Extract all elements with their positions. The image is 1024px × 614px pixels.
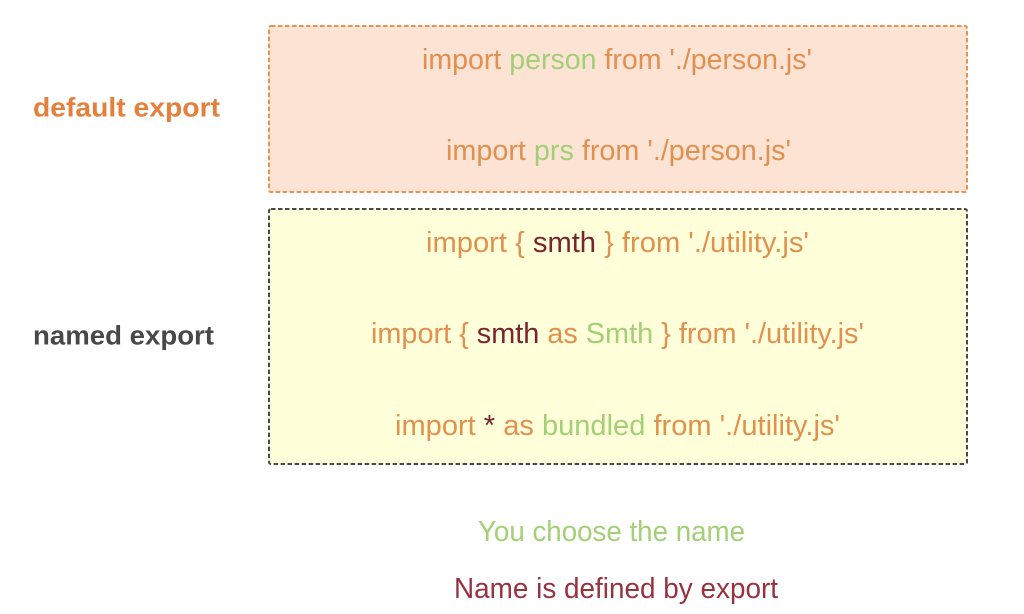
- label: named export: named export: [33, 320, 214, 350]
- code line: import smth as Smth: import { smth as Smth } from './utility.js': [371, 318, 864, 350]
- legend: name is defined by export: Name is defined by export: [454, 573, 778, 605]
- code line: import person: import person from './person.js': [422, 44, 812, 76]
- panel: default export imports: [269, 26, 967, 192]
- code line: import smth: import { smth } from './utility.js': [426, 227, 809, 259]
- legend: you choose the name: You choose the name: [478, 516, 745, 548]
- code line: import prs: import prs from './person.js': [446, 135, 791, 167]
- label: default export: default export: [33, 92, 220, 122]
- code line: import all as bundled: import * as bundled from './utility.js': [395, 410, 840, 442]
- panel: named export imports: [269, 209, 967, 464]
